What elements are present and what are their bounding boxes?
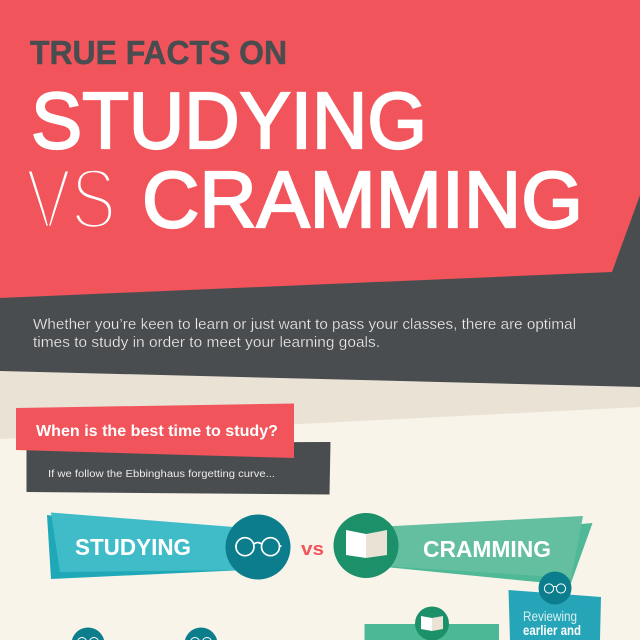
- question red box: [16, 404, 294, 458]
- reviewing card: earlier and: [523, 623, 581, 638]
- icon: partial glasses left: [72, 628, 104, 640]
- title: studying: STUDYING: [31, 76, 427, 165]
- reviewing card: [508, 572, 601, 640]
- intro text: [33, 317, 576, 351]
- intro text: times to study in order to meet your learning goals.: [33, 335, 380, 351]
- icon: book: [334, 513, 398, 578]
- title: cramming: CRAMMING: [142, 155, 583, 244]
- cramming banner: CRAMMING: [423, 536, 551, 562]
- dark intro band: [0, 190, 640, 387]
- studying banner: STUDYING: [75, 534, 191, 560]
- icon: partial glasses right: [184, 628, 218, 640]
- subheading dark box: If we follow the Ebbinghaus forgetting curve...: [48, 469, 275, 480]
- vs label: vs: [301, 538, 324, 559]
- green card: [364, 606, 499, 640]
- subheading dark box: [26, 442, 330, 494]
- studying banner: [47, 512, 290, 580]
- icon: small glasses: [538, 572, 572, 604]
- beige band: [0, 365, 640, 439]
- cramming banner: [334, 513, 592, 583]
- icon: glasses: [226, 514, 290, 580]
- title: vs: VS: [26, 152, 116, 247]
- red header panel: [0, 0, 640, 298]
- icon: small book: [415, 606, 449, 640]
- title kicker: TRUE FACTS ON: [30, 34, 287, 71]
- reviewing card: Reviewing: [523, 609, 577, 624]
- intro text: Whether you’re keen to learn or just want to pass your classes, there are optimal: [33, 317, 576, 333]
- question red box: When is the best time to study?: [36, 423, 278, 440]
